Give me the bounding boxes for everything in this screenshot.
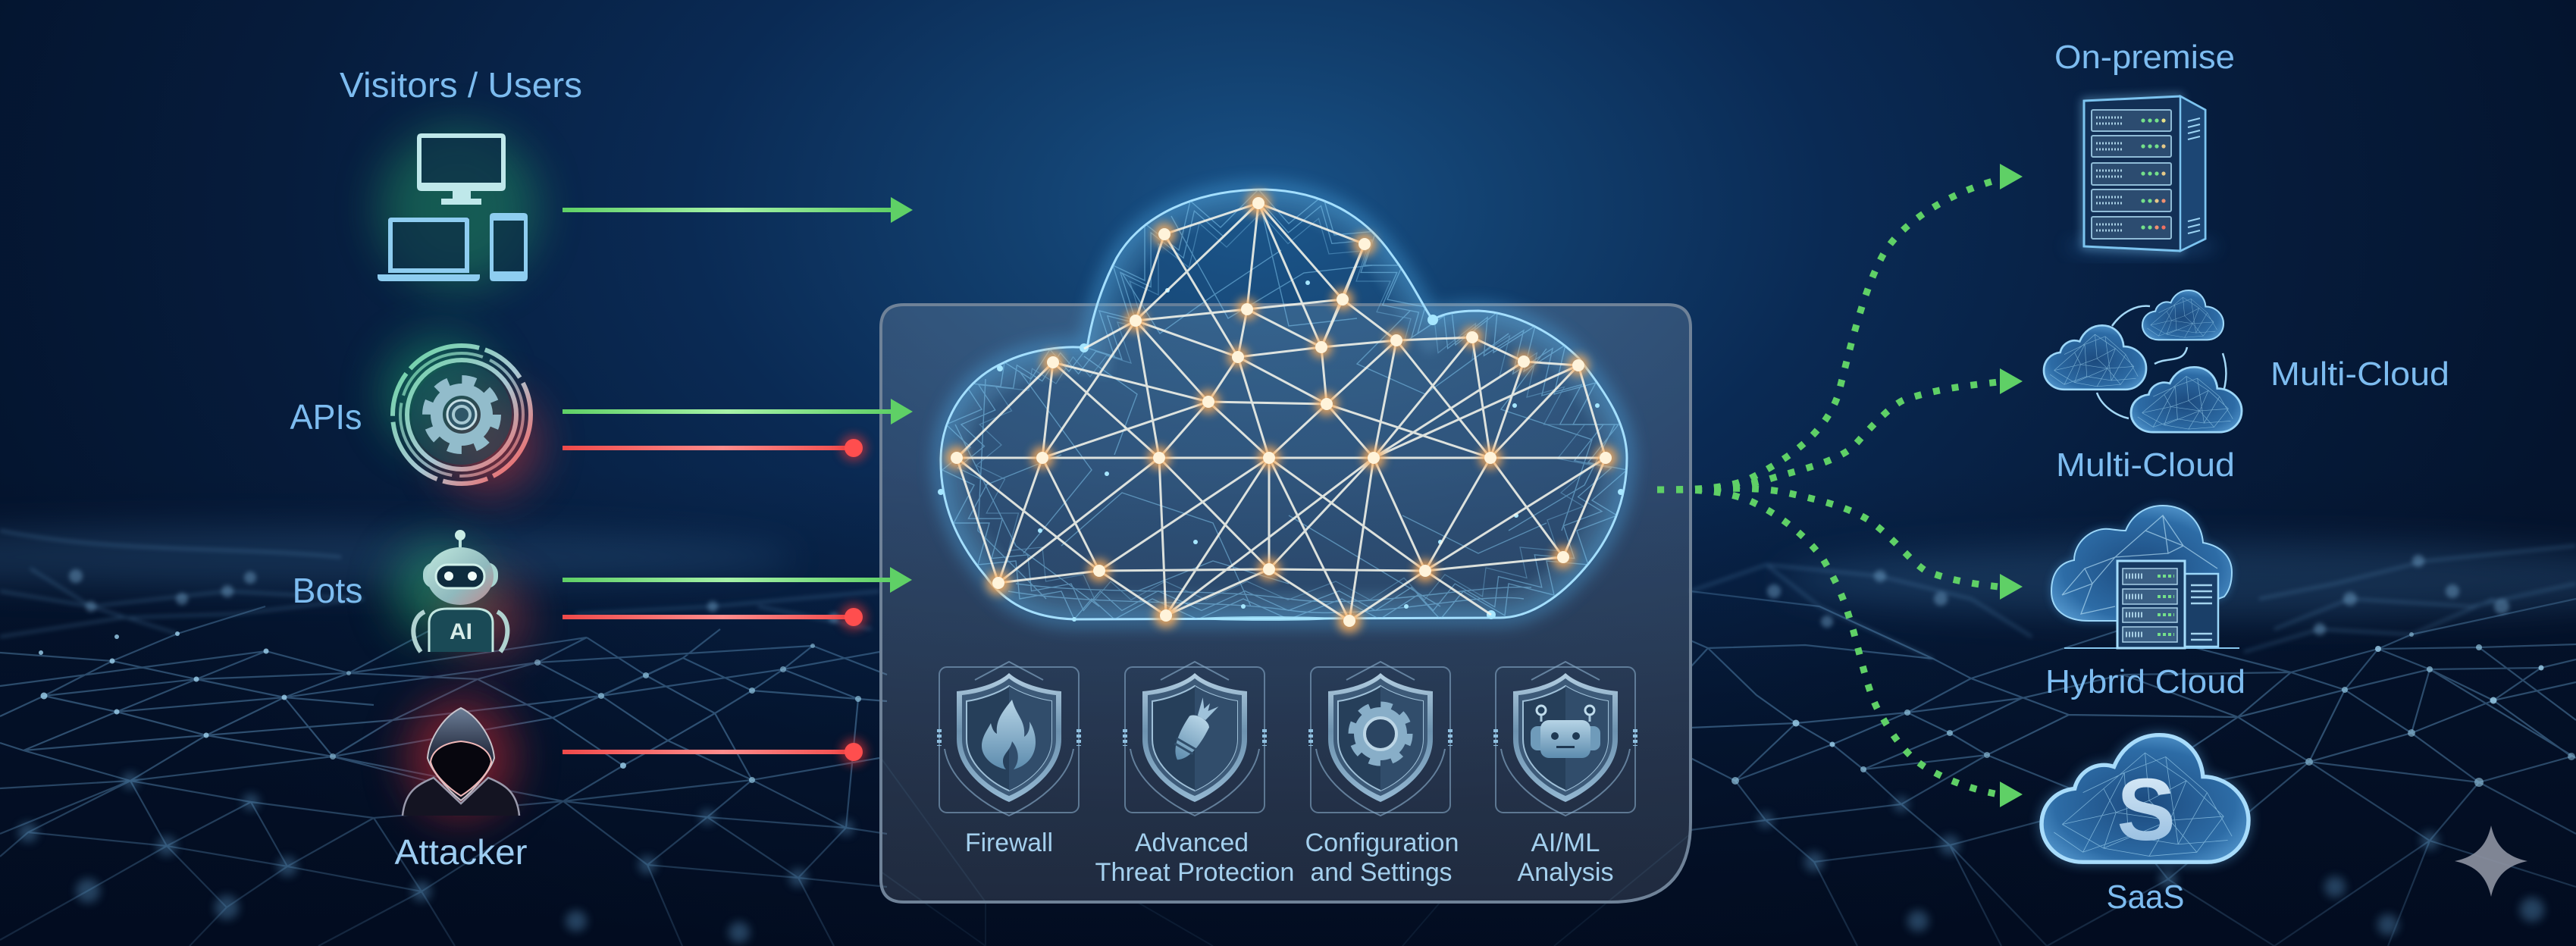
arrow: visitors allowed xyxy=(563,197,913,223)
cloud inner fine mesh xyxy=(941,190,1627,619)
arrowhead: multi-cloud xyxy=(2000,368,2023,394)
label: SaaS: SaaS xyxy=(2106,879,2185,916)
icon: watermark star xyxy=(2455,825,2527,897)
icon: hybrid cloud xyxy=(2051,506,2239,648)
label: On-premise: On-premise xyxy=(2054,39,2235,76)
shield: advanced threat protection xyxy=(1125,662,1264,816)
blurred distant mesh xyxy=(0,531,2576,659)
label: AI/ML Analysis xyxy=(1518,829,1613,887)
arrowhead: hybrid cloud xyxy=(2000,574,2023,600)
label: Attacker: Attacker xyxy=(394,832,528,872)
cloud node cores xyxy=(951,197,1612,627)
blocked line: bots xyxy=(563,603,867,631)
label: Bots: Bots xyxy=(293,571,362,610)
label: Advanced Threat Protection: Threat Protection xyxy=(1095,858,1295,887)
blocked line: API xyxy=(563,434,867,462)
network mesh floor xyxy=(0,531,2576,946)
fine mesh dots xyxy=(938,280,1624,622)
label: Advanced Threat Protection xyxy=(1095,829,1295,887)
shield: configuration and settings xyxy=(1311,662,1450,816)
heading: Visitors / Users: Visitors / Users xyxy=(340,65,582,105)
label: Configuration and Settings xyxy=(1305,829,1459,887)
arrowhead: SaaS xyxy=(2000,782,2023,807)
arrow: bots allowed xyxy=(563,567,912,593)
blocked line: attacker xyxy=(563,738,867,766)
arrowhead: on-premise xyxy=(2000,164,2023,190)
shield: AI/ML analysis xyxy=(1496,662,1635,816)
label: Multi-Cloud side: Multi-Cloud xyxy=(2270,356,2449,393)
icon: server rack xyxy=(2066,96,2217,257)
icon: attacker xyxy=(403,699,519,817)
cloud network edges xyxy=(957,203,1606,621)
blurred foreground nodes xyxy=(18,772,2544,943)
mesh nodes xyxy=(39,631,2575,787)
panel: cloud security platform xyxy=(881,305,1691,902)
icon: SaaS cloud: S xyxy=(2117,760,2176,859)
label: Multi-Cloud: Multi-Cloud xyxy=(2056,446,2235,484)
icon: AI bot: AI xyxy=(450,619,472,644)
icon: AI bot xyxy=(393,530,528,657)
label: APIs: APIs xyxy=(290,397,362,437)
label: AI/ML Analysis: AI/ML xyxy=(1531,829,1600,857)
central network cloud xyxy=(938,190,1627,633)
arrow: API allowed xyxy=(563,399,913,424)
label: Advanced Threat Protection: Advanced xyxy=(1135,829,1249,857)
label: AI/ML Analysis: Analysis xyxy=(1518,858,1613,887)
icon: API gear xyxy=(383,337,538,493)
label: Firewall: Firewall xyxy=(965,829,1053,857)
icon: SaaS cloud xyxy=(2042,735,2249,862)
label: Configuration and Settings: and Settings xyxy=(1310,858,1453,887)
icon: multi-cloud xyxy=(2044,290,2242,432)
label: Hybrid Cloud: Hybrid Cloud xyxy=(2045,663,2245,700)
cloud node glow xyxy=(945,191,1617,633)
shield: firewall xyxy=(939,662,1079,816)
dotted arrows: routes to destinations xyxy=(1657,164,2023,807)
icon: visitor devices xyxy=(378,129,538,288)
label: Configuration and Settings: Configuration xyxy=(1305,829,1459,857)
